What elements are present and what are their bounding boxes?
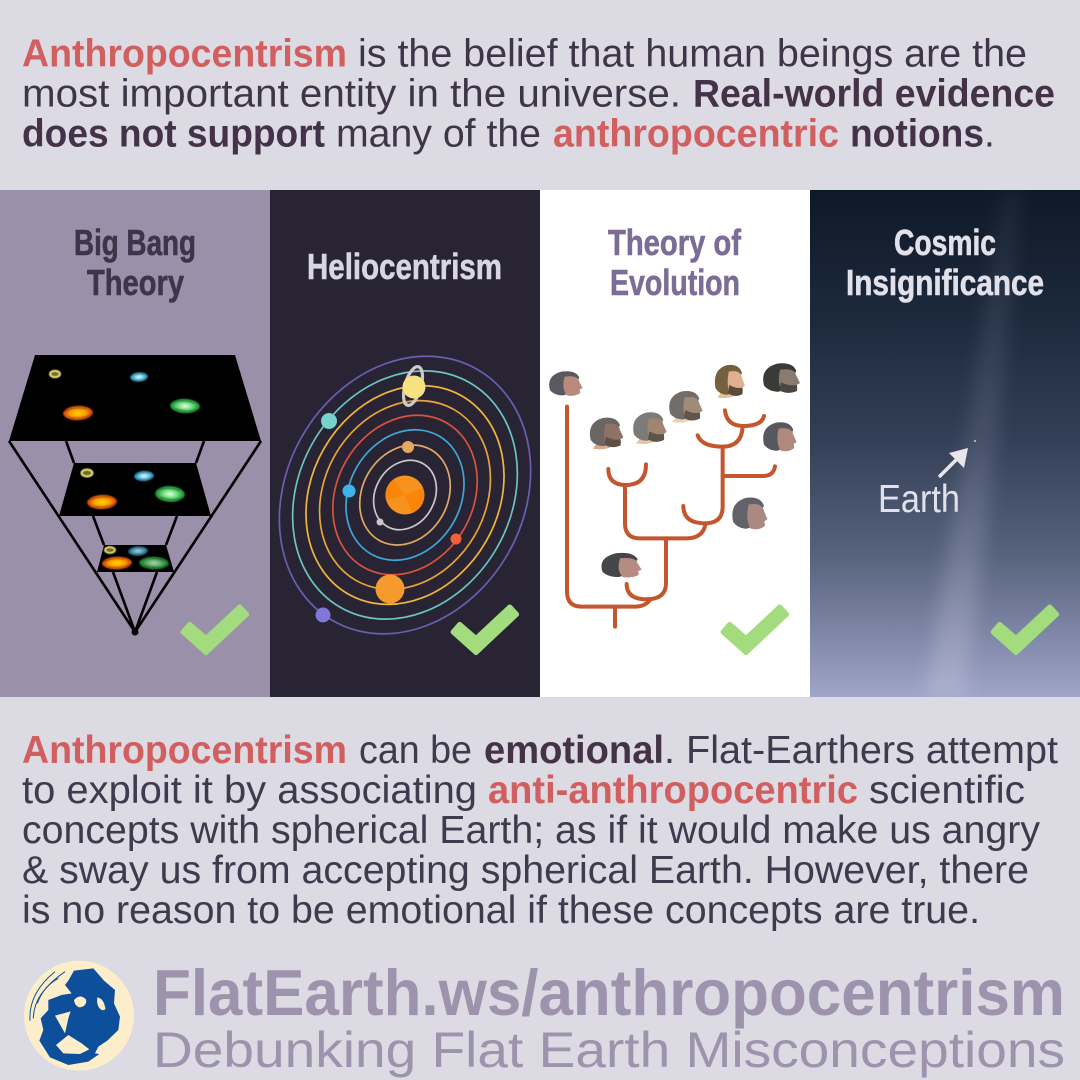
intro text block: many of the xyxy=(336,112,541,156)
intro text block: notions xyxy=(850,112,984,156)
explanation text block: concepts with spherical Earth; as if it would make us angry xyxy=(22,809,1040,852)
heading: Cosmic Insignificance: Cosmic xyxy=(894,222,996,263)
intro text block xyxy=(22,32,1055,156)
heading: Big Bang Theory xyxy=(74,222,196,303)
explanation text block: scientific xyxy=(869,769,1025,812)
explanation text block: can be xyxy=(359,729,472,772)
diagram: expanding universe layers xyxy=(9,355,261,636)
diagram: solar system orbits and planets xyxy=(230,310,580,680)
heading: Heliocentrism: Heliocentrism xyxy=(307,246,502,287)
explanation text block: . Flat-Earthers attempt xyxy=(664,729,1058,772)
explanation text block: anti-anthropocentric xyxy=(488,769,858,812)
explanation text block xyxy=(22,729,1058,932)
sunbeam streak in photo xyxy=(928,204,1014,696)
intro text block: most important entity in the universe. xyxy=(22,72,681,116)
intro text block: Anthropocentrism xyxy=(22,32,347,76)
arrow: pointing at Earth xyxy=(939,448,968,477)
label: Earth: Earth xyxy=(878,478,960,521)
intro text block: is the belief that human beings are the xyxy=(358,32,1027,76)
intro text block: Real-world evidence xyxy=(693,72,1055,116)
panel: Theory of Evolution xyxy=(540,190,810,697)
dot: Earth pale blue dot xyxy=(974,440,976,442)
footer tagline: Debunking Flat Earth Misconceptions xyxy=(153,1022,1065,1078)
icon: green check xyxy=(453,607,517,652)
explanation text block: is no reason to be emotional if these concepts are true. xyxy=(22,889,980,932)
intro text block: anthropocentric xyxy=(553,112,839,156)
explanation text block: emotional xyxy=(484,729,664,772)
panel: Heliocentrism xyxy=(230,190,580,697)
heading: Cosmic Insignificance: Insignificance xyxy=(846,262,1044,303)
panel: Cosmic Insignificance xyxy=(810,190,1080,697)
icon: green check xyxy=(183,607,247,652)
heading: Big Bang Theory: Big Bang xyxy=(74,222,196,263)
heading: Theory of Evolution: Evolution xyxy=(610,262,740,303)
panel: Big Bang Theory xyxy=(0,190,270,697)
logo: globe xyxy=(24,961,134,1071)
heading: Cosmic Insignificance xyxy=(846,222,1044,303)
intro text block: . xyxy=(984,112,995,156)
explanation text block: to exploit it by associating xyxy=(22,769,477,812)
heading: Theory of Evolution: Theory of xyxy=(608,222,742,263)
icon: green check xyxy=(993,607,1057,652)
explanation text block: & sway us from accepting spherical Earth. However, there xyxy=(22,849,1029,892)
explanation text block: Anthropocentrism xyxy=(22,729,347,772)
heading: Big Bang Theory: Theory xyxy=(87,262,184,303)
intro text block: does not support xyxy=(22,112,325,156)
heading: Theory of Evolution xyxy=(608,222,742,303)
diagram: evolutionary tree xyxy=(549,363,800,627)
icons: hominid heads xyxy=(549,363,800,577)
icon: green check xyxy=(723,607,787,652)
